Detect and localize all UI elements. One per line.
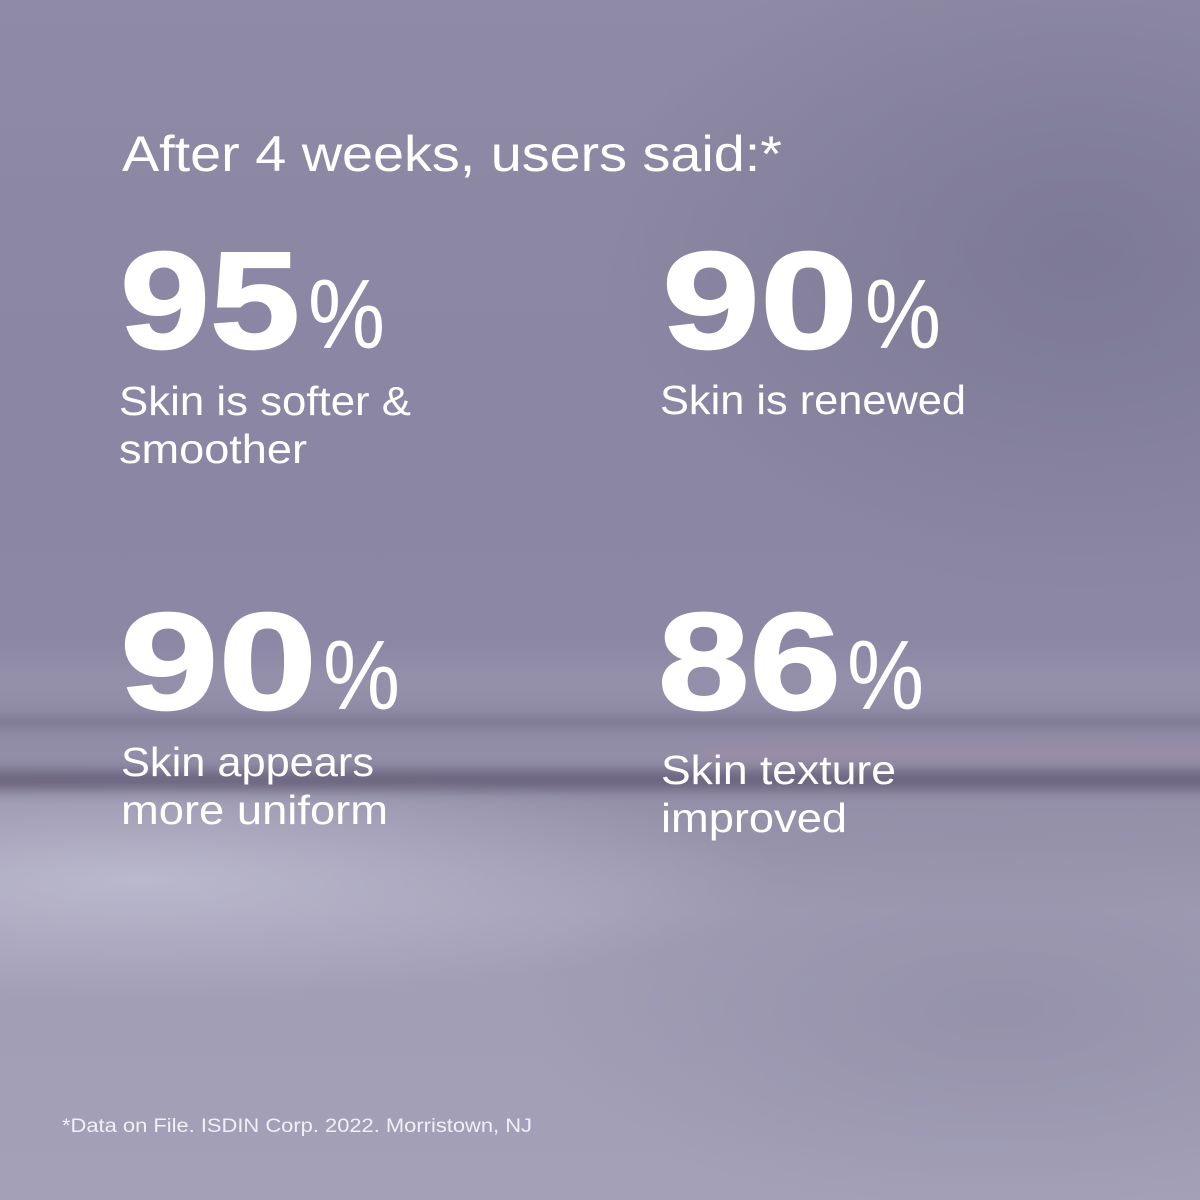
label: skin texture improved	[661, 747, 896, 841]
number: 95%: %	[308, 259, 385, 369]
footnote: *Data on File. ISDIN Corp. 2022. Morristown, NJ	[62, 1116, 532, 1137]
number: 90%: 90	[662, 224, 858, 378]
number: 86%	[658, 585, 924, 739]
label: skin appears more uniform	[121, 739, 388, 833]
label: skin softer and smoother: Skin is softer &	[119, 378, 411, 424]
number: 86%: 86	[658, 585, 841, 739]
number: 90%	[662, 224, 941, 378]
label: skin softer and smoother	[119, 378, 411, 472]
number: 95%	[120, 224, 385, 378]
number: 90%: %	[323, 620, 400, 730]
title: After 4 weeks, users said:*	[122, 126, 782, 182]
number: 90%	[120, 585, 400, 739]
stat: 95% skin softer and smoother	[119, 224, 411, 472]
stat: 90% skin renewed	[660, 224, 966, 423]
stat: 90% skin more uniform	[120, 585, 400, 833]
stat: 86% skin texture improved	[658, 585, 924, 841]
number: 95%: 95	[120, 224, 300, 378]
label: skin softer and smoother: smoother	[119, 426, 307, 472]
label: skin texture improved: Skin texture	[661, 747, 896, 793]
number: 90%: 90	[120, 585, 317, 739]
label: skin renewed: Skin is renewed	[660, 377, 966, 423]
label: skin appears more uniform: Skin appears	[121, 739, 374, 785]
label: skin appears more uniform: more uniform	[121, 787, 388, 833]
number: 90%: %	[865, 259, 941, 369]
label: skin texture improved: improved	[661, 795, 847, 841]
number: 86%: %	[847, 620, 924, 730]
